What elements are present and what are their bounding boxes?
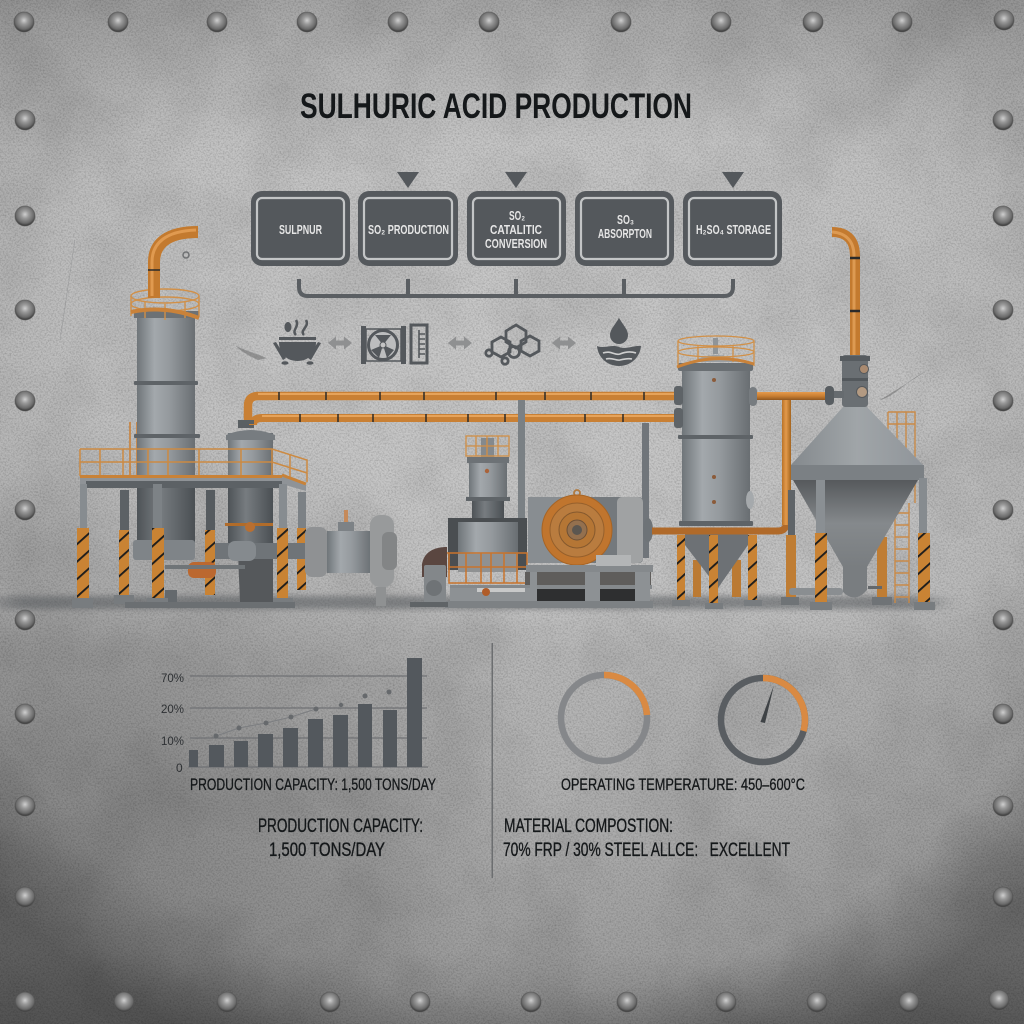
lower cone: [793, 480, 918, 567]
chart axis labels: [161, 671, 184, 775]
icon: water drop and waves: [597, 318, 641, 366]
box: SO2 production: [358, 191, 458, 266]
icon: fan radiator: [361, 325, 427, 364]
text block: material composition: MATERIAL COMPOSTION:: [504, 816, 673, 837]
secondary vessel: [226, 423, 275, 603]
box: catalytic conversion: [467, 191, 566, 266]
ladder behind tower: [130, 422, 137, 476]
box: sulphur: SULPNUR: [279, 222, 322, 237]
icon row: [273, 318, 641, 366]
chart axis labels: 0: [176, 761, 183, 775]
horizontal duct with valves: [165, 522, 307, 604]
box: H2SO4 storage: H₂SO₄ STORAGE: [696, 222, 771, 237]
compressor housing: [447, 518, 527, 583]
title: SULHURIC ACID PRODUCTION: [300, 87, 692, 126]
chart caption: PRODUCTION CAPACITY: 1,500 TONS/DAY: [190, 775, 436, 794]
bracket connecting the steps: [299, 279, 733, 296]
box: SO3 absorption: SO₃: [617, 212, 634, 227]
upper right pipe to hopper: [757, 392, 827, 400]
motor housing: [528, 497, 653, 563]
arrow: bowl to radiator: [328, 336, 352, 350]
caption: operating temperature: OPERATING TEMPERATURE: 450–600°C: [561, 775, 805, 794]
stack pipe: [832, 232, 860, 355]
left unit: main tower, platform, secondary vessel and pump: [72, 230, 397, 608]
step arrow: SO2 production: [397, 172, 419, 188]
top stack pipe: [148, 230, 198, 298]
text block: production capacity: [258, 816, 423, 861]
access ladder and cage: [888, 412, 915, 603]
arrow: molecule to water: [552, 336, 576, 350]
flanges: [674, 386, 757, 428]
box: SO3 absorption: [575, 191, 674, 266]
text block: production capacity: PRODUCTION CAPACITY:: [258, 816, 423, 837]
bar chart: [189, 658, 422, 767]
pipe supports: [518, 400, 649, 558]
back legs: [114, 490, 306, 604]
bottom outlet: [789, 567, 882, 598]
right hopper with exhaust stack: [781, 232, 935, 610]
lower horizontal drum: [133, 540, 195, 560]
neck valve with gauges: [825, 355, 870, 407]
top railing and dome: [677, 336, 754, 367]
upper cone: [791, 407, 923, 465]
process flow: five step boxes: [251, 172, 782, 266]
box: H2SO4 storage: [683, 191, 782, 266]
box: SO2 production: SO₂ PRODUCTION: [368, 222, 449, 237]
conical bottom: [685, 533, 748, 588]
vertical orange pipe: [782, 400, 791, 525]
steel skid: [445, 555, 653, 608]
orange flywheel disc: [542, 490, 612, 565]
centre unit: compressor, motor and skid: [410, 436, 653, 608]
small ring on wall: [183, 252, 189, 258]
text block: production capacity: 1,500 TONS/DAY: [269, 840, 385, 861]
back legs: [781, 490, 892, 605]
box: sulphur: [251, 191, 350, 266]
skid base: [125, 602, 295, 608]
right reactor tower: [652, 336, 791, 609]
platform deck: [80, 475, 306, 491]
icon: steaming bowl: [273, 320, 321, 365]
floor shadow band: [0, 596, 935, 609]
dial gauge: operating temperature: [721, 678, 805, 762]
chart axis labels: 70%: [161, 671, 184, 685]
panel: production capacity chart: [161, 658, 436, 794]
top railing: [131, 289, 199, 320]
box: SO3 absorption: ABSORPTON: [598, 226, 652, 241]
trend line and dots: [214, 690, 392, 738]
text block: material composition: [503, 816, 790, 861]
ring band: [791, 465, 924, 480]
tower shell: [678, 363, 754, 526]
text block: material composition: 70% FRP / 30% STEEL ALLCE: EXCELLENT: [503, 840, 790, 861]
arrow: radiator to molecule: [448, 336, 472, 350]
front legs with hazard stripes: [810, 478, 935, 610]
chart axis labels: 10%: [161, 734, 184, 748]
box: catalytic conversion: CONVERSION: [485, 236, 547, 251]
chart grid and axis: [188, 676, 428, 767]
hazard legs: [672, 535, 762, 609]
step arrow: storage: [722, 172, 744, 188]
gearbox: [410, 565, 448, 607]
front legs with hazard stripes: [72, 484, 293, 608]
small tower: [466, 436, 510, 519]
brown fan housing: [422, 547, 447, 577]
box: catalytic conversion: SO₂: [509, 208, 525, 223]
bottom rust pipe: [652, 400, 787, 531]
vertical divider: [492, 643, 493, 878]
step arrow: catalytic conversion: [505, 172, 527, 188]
chart axis labels: 20%: [161, 702, 184, 716]
icon: hexagon molecule: [486, 325, 539, 364]
orange pipes: upper and lower horizontal runs: [238, 392, 676, 425]
platform railing: [80, 449, 307, 482]
back legs: [693, 560, 741, 597]
main tower: [134, 311, 200, 543]
box: catalytic conversion: CATALITIC: [490, 222, 542, 237]
pump motor: [305, 510, 397, 606]
gauge needle: [760, 685, 774, 723]
ring gauge: material share: [561, 675, 647, 761]
